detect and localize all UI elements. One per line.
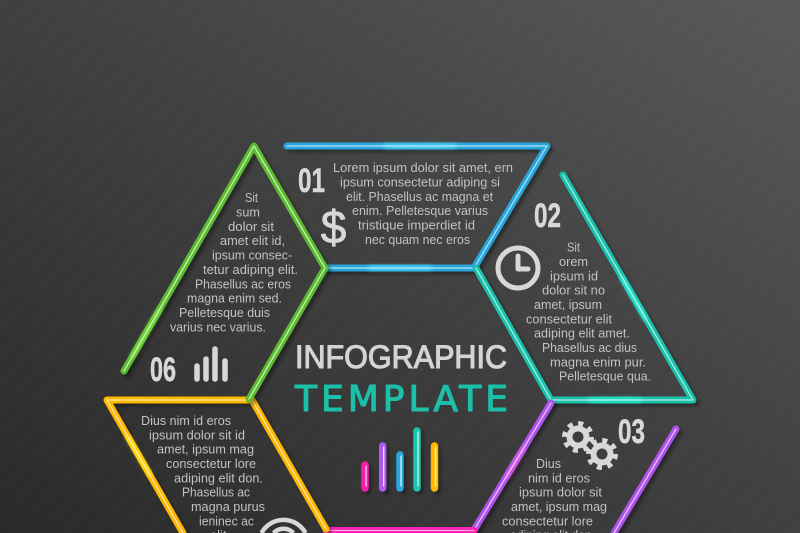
panel: 01 blue segment (287, 146, 550, 271)
panel: 02 teal segment (476, 175, 696, 403)
text block 02: Sit (567, 241, 580, 255)
number 03: 03 (618, 413, 645, 451)
panel: 03 purple segment (474, 403, 679, 533)
text block 06: ipsum consec- (212, 249, 292, 263)
teal bar (417, 431, 418, 488)
text block 01: tristique imperdiet id (358, 219, 475, 233)
pink bar (365, 465, 366, 488)
text block 01: enim. Pelletesque varius (352, 204, 488, 218)
text block 02: adiping elit amet. (534, 327, 630, 341)
text block 01: Lorem ipsum dolor sit amet, ern (333, 161, 513, 175)
centre neon bar chart (365, 431, 438, 491)
text block 06: Phasellus ac eros (195, 277, 291, 291)
title: INFOGRAPHIC: INFOGRAPHIC (295, 339, 507, 375)
text block 06 (170, 191, 298, 334)
text block 06: sum (236, 205, 260, 219)
icon: wifi (262, 520, 306, 533)
green outline (124, 146, 328, 402)
text block 02: amet, ipsum (534, 298, 602, 312)
text block 05: adiping elit don. (174, 471, 263, 485)
number 01: 01 (298, 162, 325, 200)
text block 06: dolor sit (228, 220, 275, 234)
purple outline (474, 403, 679, 533)
text block 06: amet elit id, (220, 234, 285, 248)
text block 05 (141, 414, 265, 533)
panel: 06 green segment (124, 146, 328, 402)
text block 03: amet, ipsum mag (511, 500, 607, 514)
text block 05: consectetur lore (166, 457, 256, 471)
text block 06: magna enim sed. (187, 292, 282, 306)
text block 02: consectetur elit (526, 312, 613, 326)
purple bar (383, 446, 384, 488)
text block 05: Dius nim id eros (141, 414, 231, 428)
text block 06: Sit (245, 191, 258, 205)
panel: 04 pink segment (326, 527, 474, 533)
text block 03: nim id eros (528, 471, 590, 485)
text block 02: dolor sit no (542, 284, 605, 298)
text block 03 (502, 457, 607, 533)
blue bar (400, 455, 401, 488)
text block 01: ipsum consectetur adiping si (340, 175, 500, 189)
blue outline (287, 146, 550, 271)
text block 01: nec quam nec eros (365, 233, 470, 247)
text block 02: Pelletesque qua. (559, 370, 651, 384)
yellow outline (107, 400, 329, 533)
title: TEMPLATE: TEMPLATE (294, 379, 508, 420)
text block 01: elit. Phasellus ac magna et (346, 190, 493, 204)
text block 05: ieninec ac (199, 514, 254, 528)
text block 02: magna enim pur. (550, 355, 646, 369)
icon: gears (564, 424, 616, 468)
text block 02: ipsum id (550, 269, 598, 283)
text block 05: ipsum dolor sit id (149, 428, 245, 442)
text block 06: tetur adiping elit. (203, 263, 298, 277)
icon: dollar: $ (321, 201, 346, 253)
text block 01 (333, 161, 513, 247)
text block 02: Phasellus ac dius (542, 341, 637, 355)
number 06: 06 (150, 351, 176, 389)
text block 03: Dius (536, 457, 561, 471)
text block 03: consectetur lore (502, 514, 593, 528)
icon: clock (498, 248, 538, 288)
icon: bar chart (197, 349, 225, 379)
text block 06: Pelletesque duis (179, 306, 270, 320)
text block 05: amet, ipsum mag (157, 443, 254, 457)
number 02: 02 (534, 197, 561, 235)
text block 03: ipsum dolor sit (519, 486, 602, 500)
bar shadows (368, 434, 438, 491)
text block 05: magna purus (191, 500, 265, 514)
text block 06: varius nec varius. (170, 320, 266, 334)
panel: 05 yellow segment (107, 400, 329, 533)
text block 05: Phasellus ac (182, 486, 250, 500)
yellow bar (434, 446, 436, 488)
text block 02 (526, 241, 651, 384)
text block 02: orem (559, 255, 588, 269)
teal outline (476, 175, 696, 403)
